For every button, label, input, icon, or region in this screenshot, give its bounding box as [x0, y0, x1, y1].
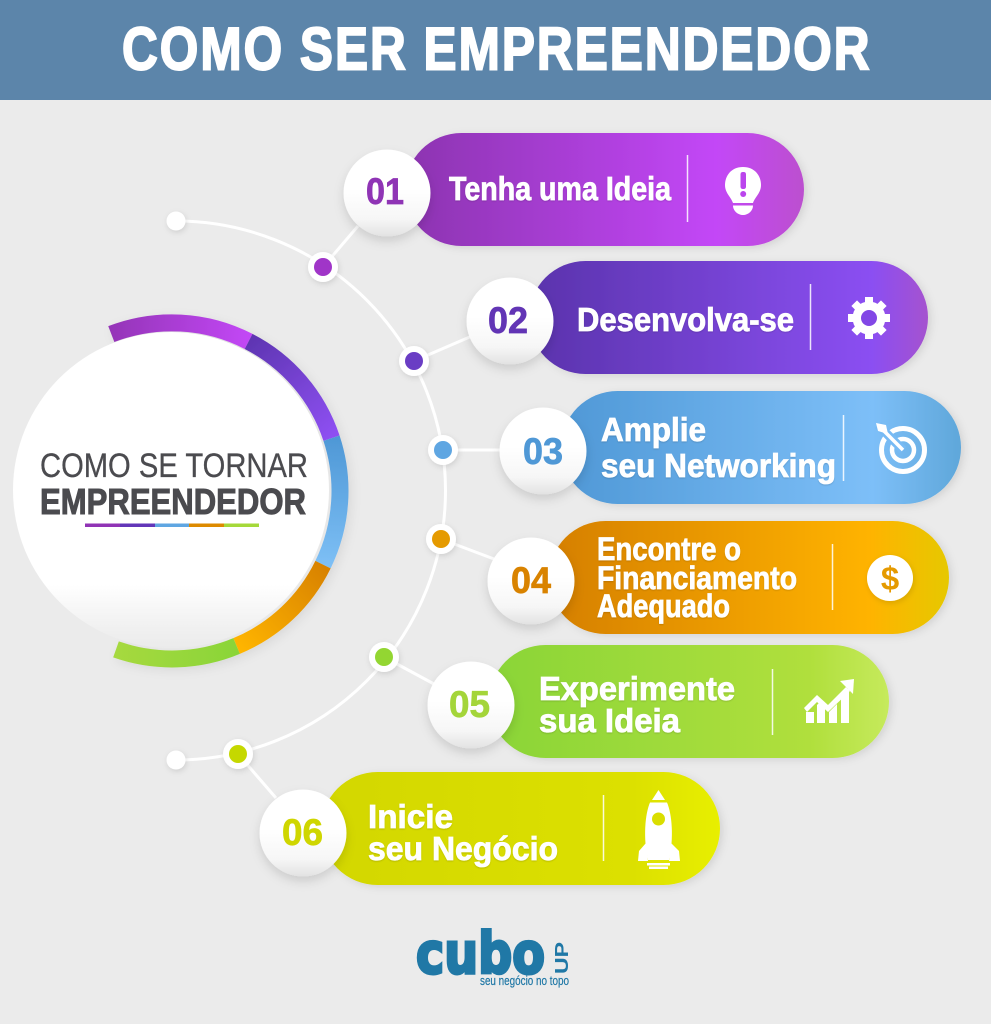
- icon: growth chart: [804, 679, 854, 723]
- step 06 label: Inicie: [368, 798, 453, 835]
- number badge 06: [260, 790, 346, 876]
- icon: target: [876, 423, 924, 472]
- icon: dollar coin: [867, 555, 913, 601]
- timeline nodes: [223, 252, 458, 769]
- step 05 label: [539, 670, 735, 739]
- step 04 label: Adequado: [597, 588, 730, 624]
- logo: cubo up: [416, 921, 572, 988]
- panel: step 05: [428, 645, 889, 758]
- number badge 01: 01: [366, 171, 404, 212]
- panel: step 06: [260, 772, 720, 885]
- number badge 02: 02: [488, 300, 528, 341]
- panel: step 01: [344, 133, 804, 246]
- step 03 label: seu Networking: [601, 447, 836, 484]
- timeline end dot top: [166, 212, 186, 230]
- icon: light bulb: [725, 167, 761, 215]
- step 03 label: Amplie: [601, 411, 706, 448]
- step 04 label: [597, 531, 797, 624]
- number badge 05: 05: [449, 684, 490, 725]
- step 05 label: Experimente: [539, 670, 735, 707]
- panel: step 04: [488, 521, 949, 634]
- number badge 04: [488, 538, 574, 624]
- number badge 03: 03: [523, 431, 563, 472]
- panel: step 02: [466, 261, 928, 374]
- logo tagline: seu negócio no topo: [480, 974, 569, 988]
- panel: step 03: [500, 391, 961, 504]
- logo wordmark: cubo: [416, 921, 545, 987]
- number badge 05: [428, 662, 514, 748]
- step 04 label: Financiamento: [597, 560, 797, 596]
- step 03 label: [601, 411, 836, 484]
- number badge 02: [466, 278, 554, 364]
- central white disc: [13, 332, 329, 648]
- step 01 label: Tenha uma Ideia: [449, 170, 672, 207]
- step 06 label: seu Negócio: [368, 830, 558, 867]
- number badge 03: [500, 408, 586, 494]
- icon: gear: [848, 297, 890, 339]
- number badge 01: [344, 150, 430, 236]
- step 02 label: Desenvolva-se: [577, 301, 794, 338]
- title text: COMO SER EMPREENDEDOR: [122, 15, 870, 83]
- colour underline: [85, 524, 259, 527]
- central circle panel: [13, 323, 340, 659]
- segmented ring: [111, 323, 340, 659]
- logo up: UP: [552, 942, 572, 974]
- title banner: [0, 0, 991, 100]
- central text line 2: EMPREENDEDOR: [40, 481, 306, 522]
- step 06 label: [368, 798, 558, 867]
- number badge 06: 06: [282, 812, 323, 853]
- icon: rocket: [638, 790, 680, 869]
- step 04 label: Encontre o: [597, 531, 741, 567]
- central text line 1: COMO SE TORNAR: [40, 447, 308, 485]
- icon: dollar coin: $: [881, 560, 899, 597]
- number badge 04: 04: [511, 560, 551, 601]
- timeline end dot bottom: [166, 750, 186, 770]
- step 05 label: sua Ideia: [539, 702, 681, 739]
- timeline arc with connectors: [176, 221, 503, 798]
